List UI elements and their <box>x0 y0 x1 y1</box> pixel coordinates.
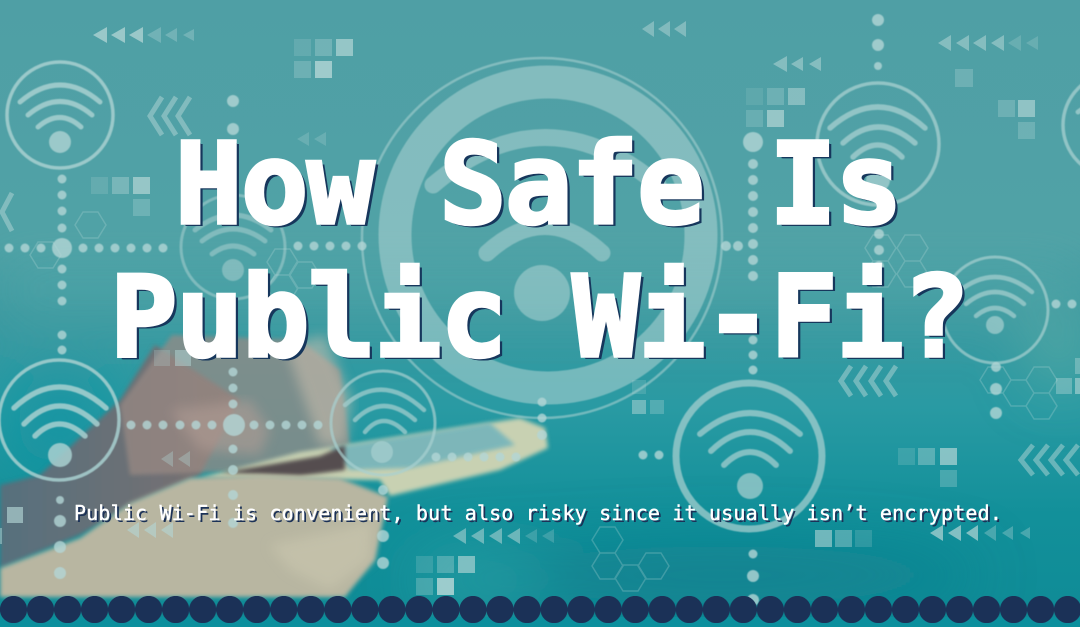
bottom teal band <box>0 617 1080 627</box>
icon: top-left wifi <box>7 62 113 168</box>
icon: right-edge wifi <box>1063 73 1080 177</box>
icon: lower-middle wifi <box>331 371 435 475</box>
icon: wifi behind title <box>181 195 285 299</box>
icon: top-right wifi <box>817 83 939 205</box>
icon: large central wifi <box>362 58 722 418</box>
hexagon clusters <box>30 212 1057 591</box>
icon: right wifi <box>942 257 1048 363</box>
bottom navy circle border <box>0 596 1080 623</box>
hands and tablet photo <box>0 335 548 597</box>
title line 2: Public Wi-Fi? <box>110 253 968 383</box>
icon: left wifi <box>0 360 119 480</box>
title line 1: How Safe Is <box>175 120 901 250</box>
subtitle: Public Wi-Fi is convenient, but also risky since it usually isn’t encrypted. <box>74 501 1002 525</box>
arrows <box>93 21 1038 544</box>
chevrons <box>2 97 1078 475</box>
icon: lower wifi <box>676 383 822 529</box>
wi-fi line art <box>0 58 1080 529</box>
